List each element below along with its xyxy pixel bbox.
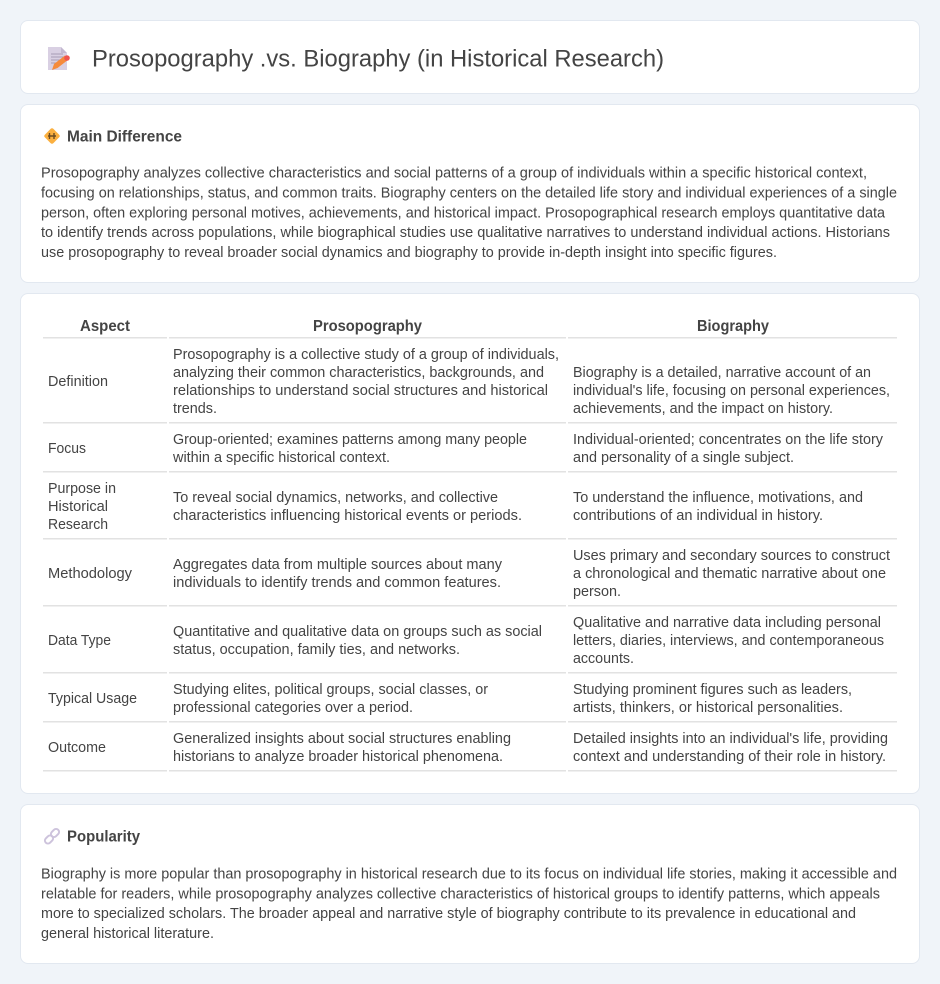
cell: prosopography methodology bbox=[173, 557, 503, 591]
row label: purpose bbox=[48, 481, 116, 533]
table header: aspect: Aspect bbox=[80, 318, 131, 335]
cell: biography methodology: a chronological and thematic narrative about one bbox=[573, 566, 886, 582]
cell: prosopography data type bbox=[173, 624, 542, 658]
cell: biography focus: Individual-oriented; concentrates on the life story bbox=[573, 432, 884, 448]
cell: prosopography definition: trends. bbox=[173, 401, 217, 417]
cell: biography outcome: context and understanding of their role in history. bbox=[573, 749, 886, 765]
icon: document with pencil bbox=[48, 47, 70, 70]
cell: biography purpose bbox=[573, 490, 863, 524]
row label: purpose: Research bbox=[48, 517, 108, 533]
cell: prosopography methodology: Aggregates data from multiple sources about many bbox=[173, 557, 503, 573]
cell: prosopography typical usage: Studying elites, political groups, social classes, or bbox=[173, 682, 488, 698]
cell: prosopography purpose bbox=[173, 490, 522, 524]
cell: biography methodology: Uses primary and secondary sources to construct bbox=[573, 548, 890, 564]
text block: main difference: person, often exploring personal motives, achievements, and historical impact. Prosopographical research employs quantitative data bbox=[41, 206, 885, 222]
cell: biography outcome bbox=[573, 731, 888, 765]
cell: biography data type: letters, diaries, interviews, and contemporaneous bbox=[573, 633, 884, 649]
panel: title card bbox=[20, 20, 920, 94]
row label: outcome: Outcome bbox=[48, 740, 106, 756]
row label: methodology: Methodology bbox=[48, 566, 133, 582]
cell: biography definition bbox=[573, 365, 890, 417]
text block: main difference bbox=[41, 166, 897, 261]
cell: biography purpose: contributions of an individual in history. bbox=[573, 508, 823, 524]
cell: prosopography data type: Quantitative and qualitative data on groups such as social bbox=[173, 624, 542, 640]
heading: popularity: Popularity bbox=[67, 828, 140, 846]
cell: prosopography outcome bbox=[173, 731, 511, 765]
cell: biography definition: achievements, and the impact on history. bbox=[573, 401, 833, 417]
cell: biography data type: accounts. bbox=[573, 651, 634, 667]
text block: popularity: general historical literature. bbox=[41, 926, 214, 942]
text block: main difference: Prosopography analyzes collective characteristics and social patterns of a group of individuals within a specific historical context, bbox=[41, 166, 867, 182]
text block: popularity: relatable for readers, while prosopography analyzes collective characteristics of historical groups to identify patterns, which appeals bbox=[41, 886, 880, 902]
cell: biography definition: Biography is a detailed, narrative account of an bbox=[573, 365, 871, 381]
cell: biography definition: individual's life, focusing on personal experiences, bbox=[573, 383, 890, 399]
table header: biography: Biography bbox=[697, 318, 769, 335]
cell: prosopography purpose: characteristics influencing historical events or periods. bbox=[173, 508, 522, 524]
icon: diamond sign bbox=[44, 128, 60, 144]
text block: main difference: focusing on relationships, status, and common traits. Biography centers on the detailed life story and individual experiences of a single bbox=[41, 186, 897, 202]
row label: purpose: Purpose in bbox=[48, 481, 116, 497]
cell: prosopography definition bbox=[173, 347, 559, 417]
cell: biography typical usage bbox=[573, 682, 852, 716]
cell: prosopography focus bbox=[172, 432, 527, 466]
cell: biography focus: and personality of a single subject. bbox=[573, 450, 794, 466]
cell: prosopography purpose: To reveal social dynamics, networks, and collective bbox=[173, 490, 498, 506]
cell: biography typical usage: Studying prominent figures such as leaders, bbox=[573, 682, 852, 698]
cell: biography outcome: Detailed insights into an individual's life, providing bbox=[573, 731, 888, 747]
cell: prosopography definition: Prosopography is a collective study of a group of individuals, bbox=[173, 347, 559, 363]
panel: popularity bbox=[20, 804, 920, 964]
panel: comparison table bbox=[20, 294, 920, 794]
cell: prosopography definition: relationships to understand social structures and historical bbox=[173, 383, 548, 399]
text block: main difference: to identify trends across populations, while biographical studies use qualitative narratives to understand individual actions. Historians bbox=[41, 225, 890, 241]
text block: popularity: more to specialized scholars. The broader appeal and narrative style of biography contribute to its prevalence in educational and bbox=[41, 906, 856, 922]
cell: prosopography definition: analyzing their common characteristics, backgrounds, and bbox=[173, 365, 544, 381]
title: Prosopography .vs. Biography (in Historical Research) bbox=[92, 46, 664, 72]
row label: typical usage: Typical Usage bbox=[48, 691, 137, 707]
cell: prosopography typical usage: professional categories over a period. bbox=[173, 700, 413, 716]
row label: focus: Focus bbox=[48, 441, 86, 457]
panel: main difference bbox=[20, 104, 920, 282]
text block: popularity bbox=[41, 866, 897, 942]
cell: biography data type bbox=[573, 615, 884, 667]
row label: data type: Data Type bbox=[48, 633, 111, 649]
row label: definition: Definition bbox=[48, 374, 108, 390]
cell: biography methodology bbox=[573, 548, 890, 600]
row label: purpose: Historical bbox=[48, 499, 108, 515]
cell: prosopography methodology: individuals to identify trends and common features. bbox=[173, 575, 501, 591]
cell: prosopography outcome: Generalized insights about social structures enabling bbox=[173, 731, 511, 747]
cell: prosopography data type: status, occupation, family ties, and networks. bbox=[173, 642, 460, 658]
cell: biography typical usage: artists, thinkers, or historical personalities. bbox=[573, 700, 843, 716]
cell: biography focus bbox=[573, 432, 884, 466]
cell: prosopography focus: within a specific historical context. bbox=[172, 450, 390, 466]
text block: main difference: use prosopography to reveal broader social dynamics and biography to provide in-depth insight into specific figures. bbox=[41, 245, 777, 261]
text block: popularity: Biography is more popular than prosopography in historical research due to its focus on individual life stories, making it accessible and bbox=[41, 866, 897, 882]
cell: biography purpose: To understand the influence, motivations, and bbox=[573, 490, 863, 506]
cell: biography data type: Qualitative and narrative data including personal bbox=[573, 615, 881, 631]
cell: prosopography outcome: historians to analyze broader historical phenomena. bbox=[173, 749, 503, 765]
cell: prosopography focus: Group-oriented; examines patterns among many people bbox=[173, 432, 527, 448]
heading: main difference: Main Difference bbox=[67, 128, 182, 146]
cell: prosopography typical usage bbox=[173, 682, 488, 716]
table header: prosopography: Prosopography bbox=[313, 318, 422, 335]
icon: chain link bbox=[44, 828, 60, 845]
cell: biography methodology: person. bbox=[573, 584, 621, 600]
